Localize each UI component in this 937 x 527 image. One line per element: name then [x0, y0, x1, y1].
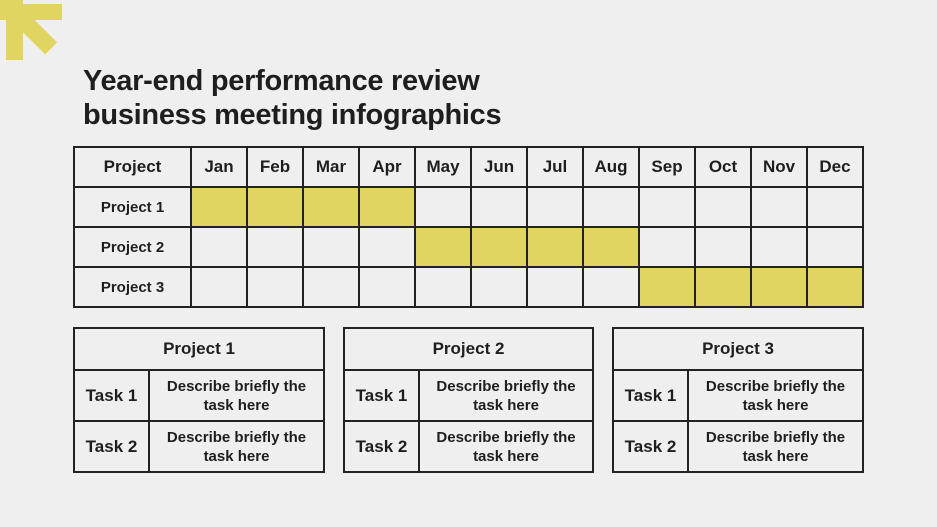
- gantt chart: Project 3: [101, 278, 164, 296]
- gantt chart: Project: [104, 157, 161, 176]
- gantt chart: Jul: [543, 157, 567, 176]
- title: Year-end performance review: [83, 65, 479, 97]
- title: [83, 65, 501, 131]
- gantt chart: Jan: [204, 157, 234, 176]
- panel: project 2 tasks: Describe briefly the: [436, 428, 576, 446]
- panel: project 1 tasks: [73, 327, 325, 473]
- gantt chart: Feb: [260, 157, 290, 176]
- title: business meeting infographics: [83, 99, 501, 131]
- panel: project 3 tasks: Task 2: [625, 436, 676, 456]
- panel: project 3 tasks: Describe briefly the: [706, 378, 845, 394]
- gantt chart: Dec: [819, 157, 851, 176]
- panel: project 3 tasks: Project 3: [702, 339, 774, 358]
- panel: project 1 tasks: Project 1: [163, 339, 235, 358]
- gantt chart: Project 1: [101, 198, 164, 216]
- panel: project 1 tasks: Describe briefly the: [167, 428, 306, 446]
- panel: project 1 tasks: Task 2: [86, 436, 137, 456]
- panel: project 3 tasks: [612, 327, 864, 473]
- gantt chart: Nov: [763, 157, 795, 176]
- panel: project 1 tasks: task here: [204, 396, 269, 414]
- panel: project 1 tasks: task here: [204, 448, 269, 464]
- gantt chart: Jun: [484, 157, 514, 176]
- panel: project 3 tasks: task here: [743, 448, 808, 464]
- gantt chart: Apr: [372, 157, 402, 176]
- gantt chart: Aug: [594, 157, 628, 176]
- panel: project 3 tasks: task here: [743, 396, 808, 414]
- gantt chart: Sep: [651, 157, 683, 176]
- panel: project 2 tasks: Task 1: [356, 386, 407, 404]
- panel: project 3 tasks: Task 1: [625, 386, 676, 404]
- panel: project 2 tasks: Task 2: [356, 436, 407, 456]
- gantt chart: Mar: [316, 157, 346, 176]
- panel: project 1 tasks: Describe briefly the: [167, 378, 306, 394]
- panel: project 1 tasks: Task 1: [86, 386, 137, 404]
- panel: project 2 tasks: [343, 327, 594, 473]
- gantt chart: May: [426, 157, 460, 176]
- panel: project 3 tasks: Describe briefly the: [706, 428, 845, 446]
- gantt chart: Project 2: [101, 238, 164, 256]
- panel: project 2 tasks: task here: [473, 448, 539, 464]
- icon: yellow asterisk: [0, 0, 62, 60]
- panel: project 2 tasks: Project 2: [433, 339, 504, 358]
- gantt chart: Oct: [709, 157, 737, 176]
- panel: project 2 tasks: task here: [473, 396, 539, 414]
- gantt chart: [73, 146, 864, 308]
- panel: project 2 tasks: Describe briefly the: [436, 378, 576, 394]
